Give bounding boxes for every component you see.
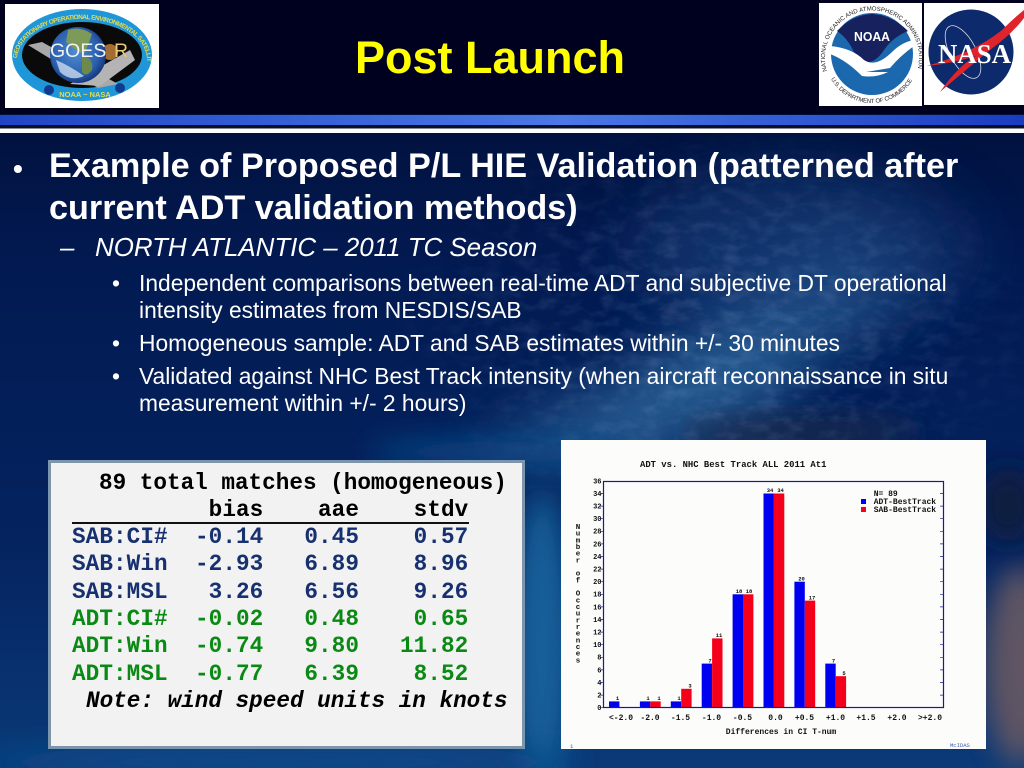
chart legend [861,490,936,515]
y axis title: c [576,597,581,605]
x axis labels: -0.5 [733,714,752,723]
main bullet text: • [13,153,23,184]
y axis labels: 30 [593,516,602,524]
detail bullets: measurement within +/- 2 hours) [139,390,467,416]
bar value labels [616,487,846,702]
y axis labels: 6 [597,667,602,675]
blue bars: ADT-BestTrack [609,494,836,708]
y axis labels [593,478,602,713]
y axis title: e [576,631,581,639]
y axis labels: 20 [593,579,602,587]
y axis labels: 36 [593,478,602,486]
y axis labels: 22 [593,566,602,574]
bar value labels: 11 [716,632,723,639]
y axis labels: 16 [593,604,602,612]
bar value labels: 5 [842,670,846,677]
bar value labels: 7 [832,658,835,664]
main bullet text: current ADT validation methods) [49,189,578,227]
chart legend: N= 89 [874,490,898,499]
rows: ADT: ADT:CI# -0.02 0.48 0.65 ADT:Win -0.74 9.80 11.82 ADT:MSL -0.77 6.39 8.52 [72,606,468,687]
red bars: SAB-BestTrack [650,494,846,708]
y axis title: m [576,537,581,545]
logo: GOES-R mission badge: GOES [50,40,106,62]
logo: GOES-R mission badge: NOAA ~ NASA [59,90,111,99]
bar value labels: 20 [798,576,805,582]
y axis labels: 0 [597,705,602,713]
x axis labels: <-2.0 [609,714,633,723]
table heading: 89 total matches (homogeneous) [99,470,507,496]
logo: NASA meatball: NASA [938,39,1011,69]
y axis title: o [576,571,581,579]
text: NORTH ATLANTIC – 2011 TC Season [95,234,537,262]
y axis labels: 2 [597,692,602,700]
x axis labels [609,714,942,723]
y axis title: c [576,644,581,652]
sub-heading: season: – [60,234,74,262]
y axis title: f [576,577,581,585]
x axis labels: +1.5 [856,714,876,723]
chart footer labels: 1 [570,743,574,750]
main bullet text: Example of Proposed P/L HIE Validation (patterned after [49,147,958,185]
x axis labels: +0.5 [795,714,814,723]
x axis labels: >+2.0 [918,714,942,723]
y axis title: b [576,544,581,552]
chart footer labels [570,742,971,750]
y axis labels: 18 [593,592,602,600]
y axis labels: 28 [593,529,602,537]
bar value labels: 1 [677,695,681,702]
y axis title: u [576,531,580,539]
chart title: ADT vs. NHC Best Track ALL 2011 At1 [640,460,826,470]
chart legend: ADT-BestTrack [874,498,936,507]
bar value labels: 34 [767,487,774,494]
y axis labels: 10 [593,642,602,650]
logo: NOAA seal: NOAA [854,29,891,44]
y axis title: r [576,624,580,632]
x axis labels: +2.0 [887,714,907,723]
chart legend: SAB-BestTrack [874,506,936,515]
y axis title: r [576,617,580,625]
column headers: bias aae stdv [209,497,468,523]
bar value labels: 3 [688,682,692,690]
y axis title: u [576,611,580,619]
main bullet text [13,147,958,227]
y axis title: s [576,657,581,665]
logo: GOES-R mission badge [5,4,159,108]
logo: NASA meatball [924,3,1024,105]
logo: NOAA seal: NATIONAL OCEANIC AND ATMOSPHERIC ADMINISTRATION [820,6,923,72]
y axis title: n [576,637,581,645]
y axis labels: 32 [593,504,602,512]
y axis title: O [576,591,581,599]
panel: statistics table [48,460,525,749]
y axis labels: 34 [593,491,602,499]
y axis labels: 8 [597,655,602,663]
x axis title: Differences in CI T-num [726,728,836,737]
title: Post Launch [355,32,625,83]
y axis labels: 26 [593,541,602,549]
detail bullets: • [112,270,120,296]
x axis labels: -1.5 [671,714,690,723]
x axis labels: 0.0 [768,714,783,723]
detail bullets [112,270,948,416]
y axis title: e [576,651,581,659]
rows: SAB: SAB:CI# -0.14 0.45 0.57 SAB:Win -2.93 6.89 8.96 SAB:MSL 3.26 6.56 9.26 [72,524,468,605]
bar value labels: 7 [708,658,712,664]
sub-heading: season [60,234,537,262]
bar value labels: 18 [746,588,753,595]
bar value labels: 17 [809,594,815,602]
x axis labels: -2.0 [640,714,660,723]
x axis labels: -1.0 [702,714,721,723]
plot frame and ticks [600,482,944,708]
bar value labels: 1 [616,695,620,702]
logo: NOAA seal [819,3,923,106]
logo: NOAA seal: U.S. DEPARTMENT OF COMMERCE [832,77,912,103]
detail bullets: Validated against NHC Best Track intensity (when aircraft reconnaissance in situ [139,363,948,389]
detail bullets: intensity estimates from NESDIS/SAB [139,297,522,323]
table note: Note: wind speed units in knots [86,688,507,714]
chart footer labels: McIDAS [950,742,971,749]
y axis labels: 4 [597,680,602,688]
bar value labels: 1 [646,695,650,702]
y axis title: c [576,604,581,612]
y axis title: r [576,557,580,565]
y axis labels: 12 [593,630,602,638]
detail bullets: • [112,363,120,389]
y axis title: e [576,551,581,559]
logo: GOES-R mission badge: R [114,40,128,62]
column headers [72,499,469,524]
y axis labels: 24 [593,554,602,562]
x axis labels: +1.0 [826,714,845,723]
detail bullets: Independent comparisons between real-time ADT and subjective DT operational [139,270,947,296]
bar value labels: 18 [736,588,743,595]
bar value labels: 1 [657,695,661,702]
detail bullets: • [112,330,120,356]
y axis title: N [576,524,580,532]
y axis labels: 14 [593,617,602,625]
detail bullets: Homogeneous sample: ADT and SAB estimates within +/- 30 minutes [139,330,840,356]
bar value labels: 34 [777,487,784,494]
